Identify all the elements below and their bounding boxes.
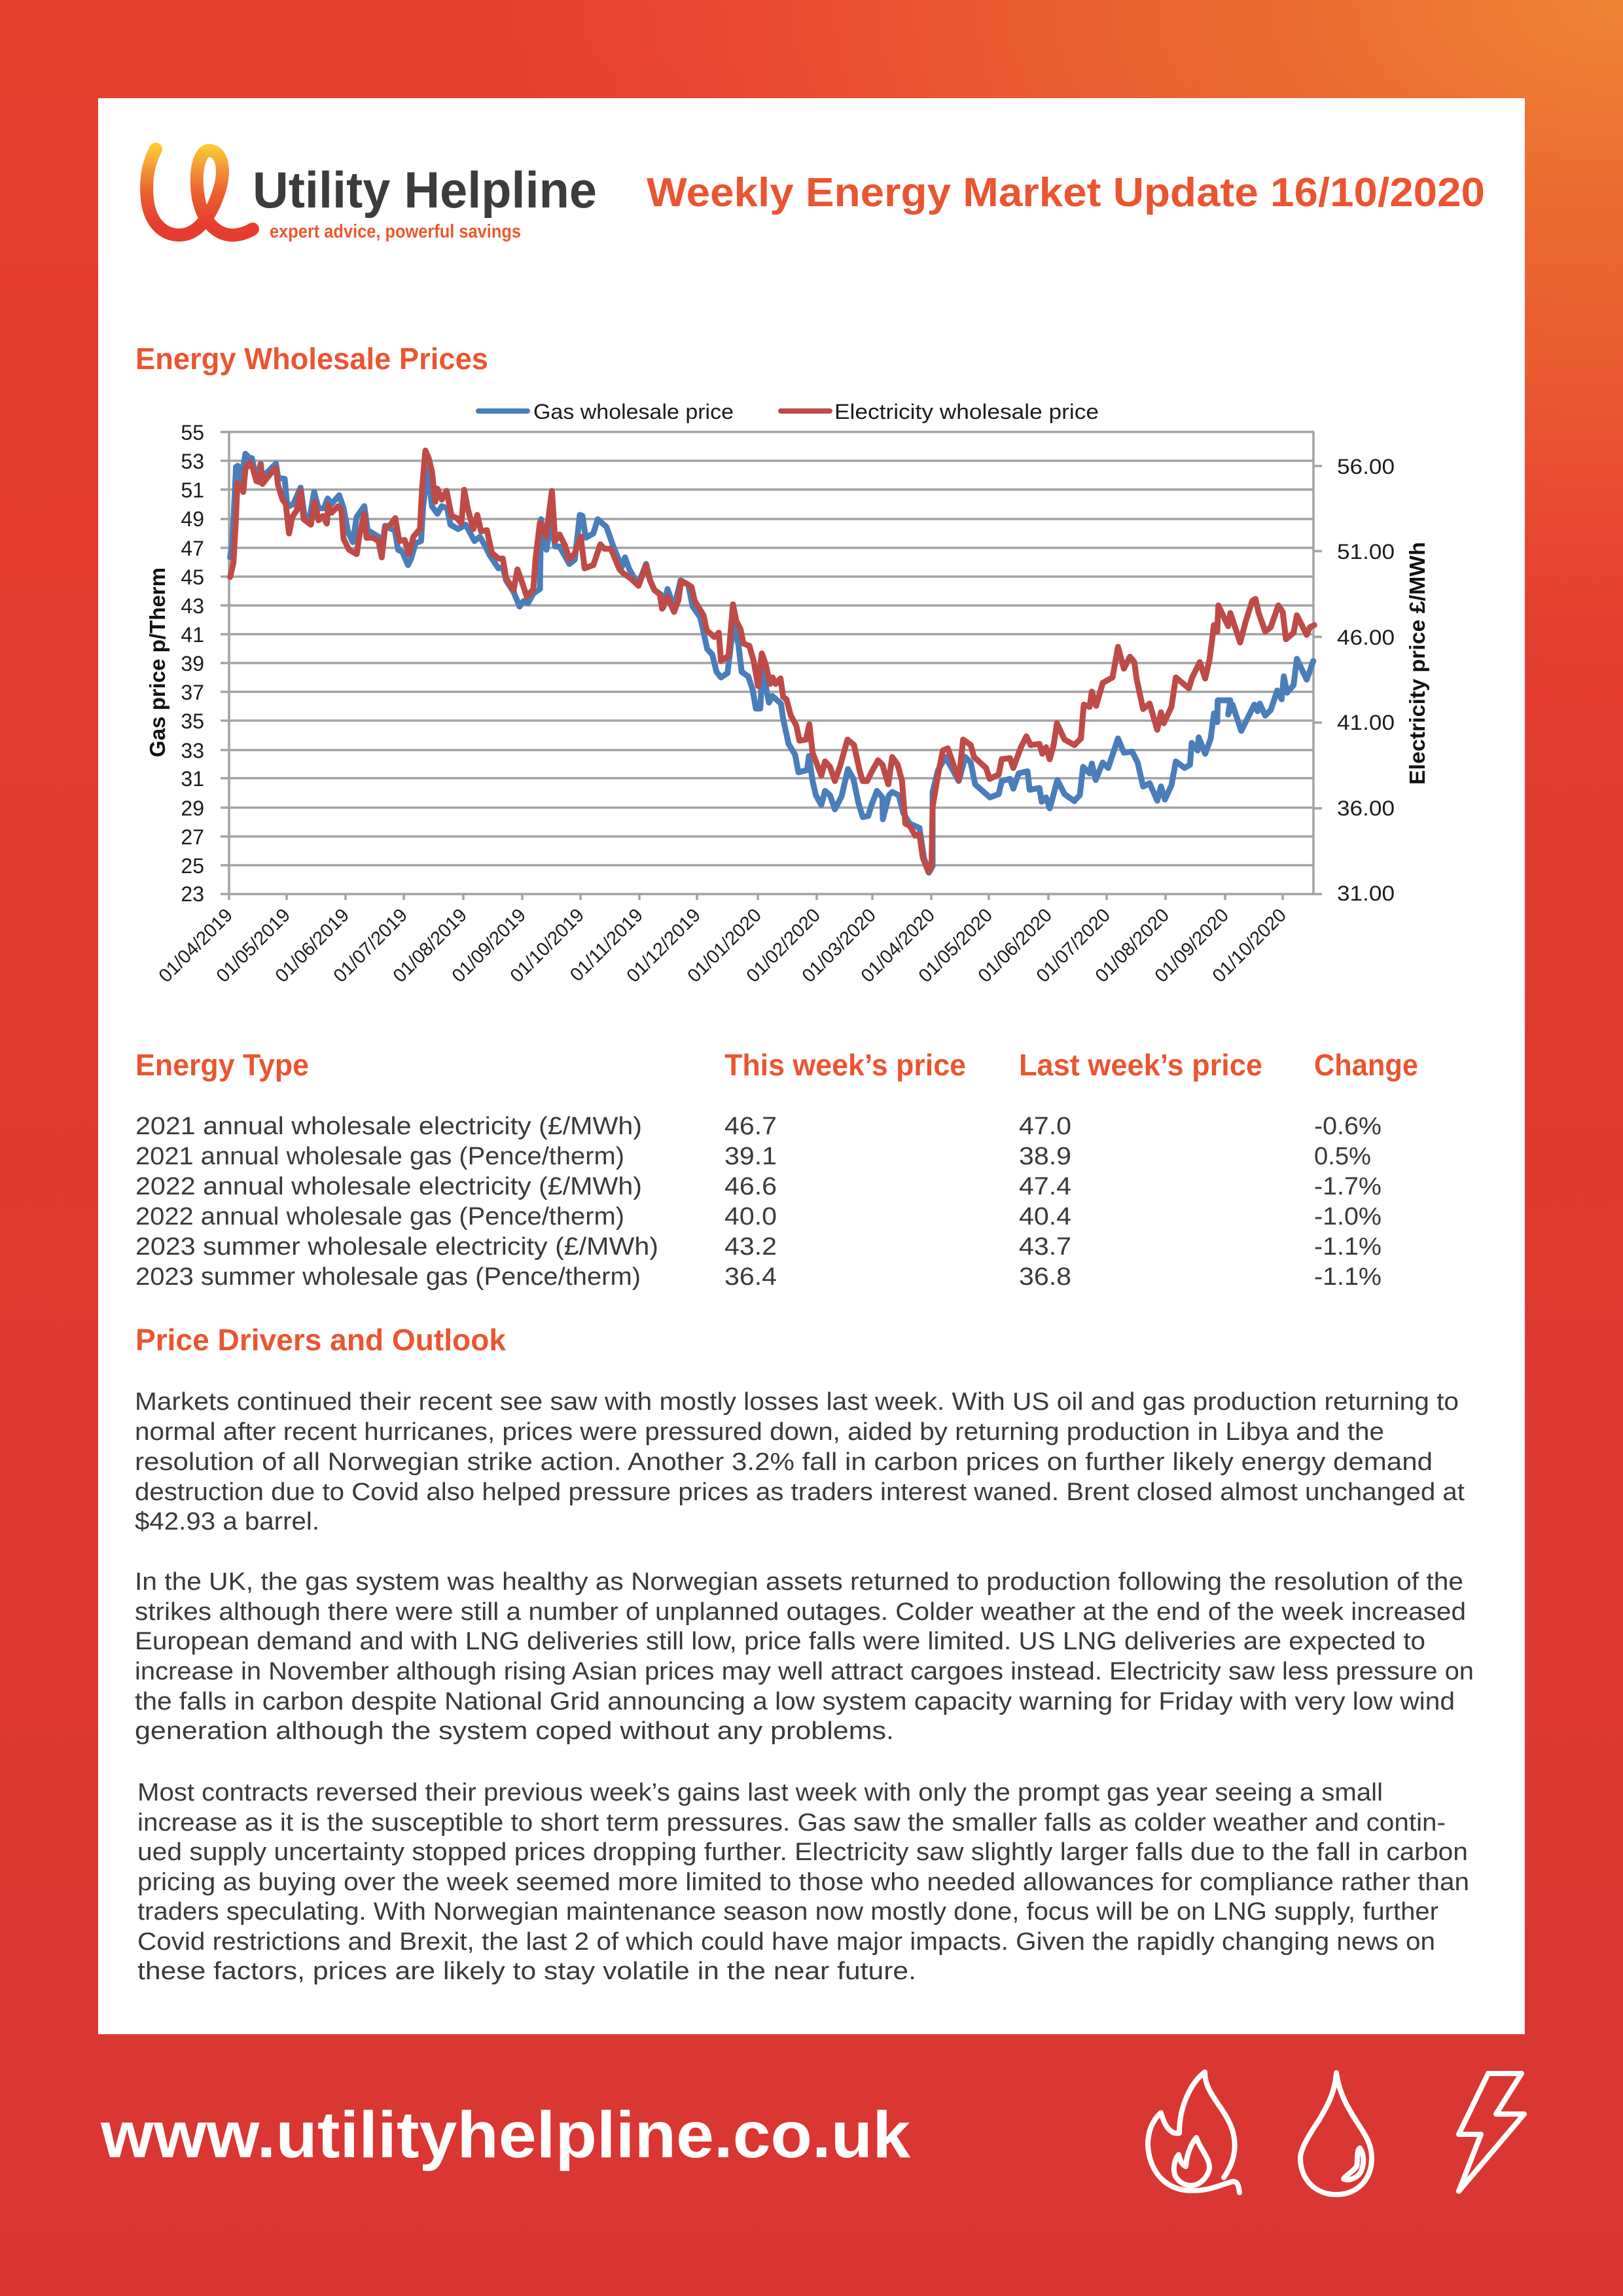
date axis labels: 01/07/2019 bbox=[330, 905, 412, 987]
left axis labels bbox=[181, 421, 204, 906]
row: 2021 annual electricity: 47.0 bbox=[1019, 1113, 1071, 1140]
legend: Gas wholesale price bbox=[533, 400, 734, 423]
heading: Energy Wholesale Prices: Energy Wholesale Prices bbox=[135, 342, 488, 376]
left axis labels: 37 bbox=[181, 681, 204, 704]
paragraph: markets overview: destruction due to Covid also helped pressure prices as traders interest waned. Brent closed almost unchanged at bbox=[135, 1479, 1465, 1506]
row: 2022 annual electricity: 47.4 bbox=[1019, 1173, 1071, 1200]
paragraph: markets overview: normal after recent hurricanes, prices were pressured down, aided by returning production in Libya and the bbox=[135, 1418, 1384, 1446]
left axis labels: 45 bbox=[181, 565, 204, 589]
left axis labels: 47 bbox=[181, 537, 204, 560]
left axis labels: 39 bbox=[181, 652, 204, 675]
row: 2021 annual gas: 39.1 bbox=[724, 1143, 777, 1170]
row: 2021 annual gas: 2021 annual wholesale gas (Pence/therm) bbox=[135, 1143, 624, 1170]
date axis labels: 01/08/2020 bbox=[1092, 905, 1173, 987]
right axis labels bbox=[1337, 455, 1395, 905]
heading: Price Drivers and Outlook: Price Drivers and Outlook bbox=[135, 1323, 506, 1357]
paragraph: markets overview: Markets continued their recent see saw with mostly losses last week. With US oil and gas production returning to bbox=[135, 1388, 1459, 1416]
right axis labels: 46.00 bbox=[1337, 626, 1395, 649]
website address: www.utilityhelpline.co.uk bbox=[100, 2098, 910, 2172]
row: 2022 annual gas bbox=[135, 1203, 1382, 1230]
row: 2022 annual gas: -1.0% bbox=[1314, 1203, 1382, 1230]
date axis labels: 01/05/2019 bbox=[213, 905, 294, 987]
date axis labels: 01/06/2020 bbox=[974, 905, 1056, 987]
icon: gas flame bbox=[1148, 2072, 1240, 2193]
date axis labels: 01/02/2020 bbox=[743, 905, 825, 987]
right axis labels: 56.00 bbox=[1337, 455, 1395, 478]
left axis labels: 43 bbox=[181, 594, 204, 618]
row: 2021 annual electricity: 2021 annual wholesale electricity (£/MWh) bbox=[135, 1113, 642, 1140]
table header: Last week’s price bbox=[1019, 1048, 1262, 1082]
tagline: expert advice, powerful savings bbox=[270, 221, 521, 242]
wordmark: Utility Helpline bbox=[253, 161, 597, 219]
row: 2023 summer gas: -1.1% bbox=[1314, 1263, 1382, 1291]
date axis labels: 01/12/2019 bbox=[623, 905, 705, 987]
left axis labels: 51 bbox=[181, 478, 204, 502]
legend: Electricity wholesale price bbox=[834, 400, 1099, 423]
paragraph: UK market: generation although the system coped without any problems. bbox=[135, 1717, 894, 1745]
paragraph: UK market: increase in November although rising Asian prices may well attract cargoes instead. Electricity saw less pressure on bbox=[135, 1658, 1474, 1685]
price table bbox=[135, 1048, 1418, 1291]
row: 2021 annual gas: 38.9 bbox=[1019, 1143, 1071, 1170]
paragraph: contracts outlook: Most contracts reversed their previous week’s gains last week with only the prompt gas year seeing a small bbox=[137, 1779, 1383, 1806]
right axis labels: 36.00 bbox=[1337, 797, 1395, 820]
row: 2022 annual gas: 40.4 bbox=[1019, 1203, 1071, 1230]
row: 2023 summer gas: 36.8 bbox=[1019, 1263, 1071, 1291]
left axis labels: 35 bbox=[181, 709, 204, 733]
paragraph: UK market: European demand and with LNG deliveries still low, price falls were limited. US LNG deliveries are expected to bbox=[135, 1628, 1425, 1655]
row: 2021 annual electricity: 46.7 bbox=[724, 1113, 777, 1140]
series: electricity wholesale price bbox=[230, 450, 1314, 872]
right axis labels: 41.00 bbox=[1337, 711, 1395, 734]
left axis labels: 53 bbox=[181, 450, 204, 473]
date axis labels: 01/07/2020 bbox=[1033, 905, 1115, 987]
logo: Utility Helpline bbox=[147, 149, 597, 242]
line chart: gas and electricity wholesale prices bbox=[145, 400, 1429, 987]
left axis labels: 29 bbox=[181, 797, 204, 820]
right axis labels: 51.00 bbox=[1337, 540, 1395, 564]
paragraph: markets overview: $42.93 a barrel. bbox=[135, 1508, 319, 1535]
table header: Change bbox=[1314, 1048, 1418, 1082]
paragraph: UK market: the falls in carbon despite National Grid announcing a low system capacity warning for Friday with very low wind bbox=[135, 1688, 1455, 1715]
left axis labels: 31 bbox=[181, 767, 204, 791]
left axis labels: 49 bbox=[181, 507, 204, 531]
row: 2021 annual gas bbox=[135, 1143, 1371, 1170]
paragraph: contracts outlook: these factors, prices are likely to stay volatile in the near future. bbox=[137, 1958, 916, 1985]
row: 2021 annual gas: 0.5% bbox=[1314, 1143, 1371, 1170]
row: 2023 summer gas: 2023 summer wholesale gas (Pence/therm) bbox=[135, 1263, 641, 1291]
legend bbox=[478, 400, 1099, 423]
date axis labels: 01/04/2019 bbox=[155, 905, 237, 987]
left axis labels: 55 bbox=[181, 421, 204, 444]
row: 2023 summer electricity bbox=[135, 1233, 1382, 1261]
date axis labels: 01/09/2020 bbox=[1151, 905, 1233, 987]
left axis labels: 23 bbox=[181, 882, 204, 906]
date axis labels: 01/06/2019 bbox=[272, 905, 353, 987]
icon: looped U ribbon bbox=[147, 149, 253, 235]
row: 2022 annual electricity bbox=[135, 1173, 1382, 1200]
row: 2022 annual electricity: 46.6 bbox=[724, 1173, 777, 1200]
row: 2021 annual electricity bbox=[135, 1113, 1382, 1140]
paragraph: markets overview bbox=[135, 1388, 1465, 1535]
icon: lightning bolt bbox=[1459, 2073, 1524, 2191]
title: Weekly Energy Market Update 16/10/2020 bbox=[647, 170, 1485, 215]
paragraph: contracts outlook: Covid restrictions and Brexit, the last 2 of which could have major impacts. Given the rapidly changing news on bbox=[137, 1928, 1435, 1956]
paragraph: UK market: strikes although there were still a number of unplanned outages. Colder weather at the end of the week increased bbox=[135, 1598, 1466, 1626]
date axis labels: 01/03/2020 bbox=[798, 905, 880, 987]
row: 2023 summer electricity: 2023 summer wholesale electricity (£/MWh) bbox=[135, 1233, 658, 1261]
left axis labels: 41 bbox=[181, 623, 204, 647]
table header bbox=[135, 1048, 1418, 1082]
row: 2022 annual gas: 40.0 bbox=[724, 1203, 777, 1230]
row: 2023 summer gas: 36.4 bbox=[724, 1263, 777, 1291]
series: gas wholesale price bbox=[230, 454, 1313, 872]
date axis labels: 01/05/2020 bbox=[915, 905, 997, 987]
row: 2023 summer electricity: 43.7 bbox=[1019, 1233, 1071, 1261]
row: 2023 summer gas bbox=[135, 1263, 1382, 1291]
row: 2022 annual electricity: 2022 annual wholesale electricity (£/MWh) bbox=[135, 1173, 642, 1200]
row: 2023 summer electricity: 43.2 bbox=[724, 1233, 777, 1261]
row: 2022 annual gas: 2022 annual wholesale gas (Pence/therm) bbox=[135, 1203, 624, 1230]
date axis labels bbox=[155, 905, 1291, 987]
date axis labels: 01/11/2019 bbox=[566, 905, 647, 986]
left axis labels: 27 bbox=[181, 825, 204, 849]
left axis labels: 25 bbox=[181, 854, 204, 878]
date axis labels: 01/04/2020 bbox=[857, 905, 939, 987]
date axis labels: 01/08/2019 bbox=[389, 905, 471, 987]
paragraph: contracts outlook bbox=[137, 1779, 1469, 1985]
date axis labels: 01/01/2020 bbox=[684, 905, 766, 987]
table header: Energy Type bbox=[135, 1048, 309, 1082]
row: 2021 annual electricity: -0.6% bbox=[1314, 1113, 1382, 1140]
date axis labels: 01/09/2019 bbox=[448, 905, 530, 987]
white content panel bbox=[98, 98, 1525, 2034]
paragraph: UK market: In the UK, the gas system was healthy as Norwegian assets returned to production following the resolution of the bbox=[135, 1568, 1463, 1596]
paragraph: contracts outlook: traders speculating. With Norwegian maintenance season now mostly done, focus will be on LNG supply, further bbox=[137, 1898, 1438, 1926]
row: 2022 annual electricity: -1.7% bbox=[1314, 1173, 1382, 1200]
left axis title: Gas price p/Therm bbox=[145, 567, 169, 757]
paragraph: markets overview: resolution of all Norwegian strike action. Another 3.2% fall in carbon prices on further likely energy demand bbox=[135, 1448, 1433, 1476]
paragraph: contracts outlook: ued supply uncertainty stopped prices dropping further. Electricity saw slightly larger falls due to the fall in carbon bbox=[137, 1839, 1468, 1866]
date axis labels: 01/10/2020 bbox=[1209, 905, 1291, 987]
icon: water drop bbox=[1300, 2073, 1372, 2195]
paragraph: UK market bbox=[135, 1568, 1474, 1745]
date axis labels: 01/10/2019 bbox=[507, 905, 588, 987]
paragraph: contracts outlook: pricing as buying over the week seemed more limited to those who needed allowances for compliance rather than bbox=[137, 1869, 1469, 1896]
left axis labels: 33 bbox=[181, 739, 204, 762]
right axis labels: 31.00 bbox=[1337, 882, 1395, 905]
table header: This week’s price bbox=[724, 1048, 966, 1082]
right axis title: Electricity price £/MWh bbox=[1405, 542, 1429, 785]
row: 2023 summer electricity: -1.1% bbox=[1314, 1233, 1382, 1261]
paragraph: contracts outlook: increase as it is the susceptible to short term pressures. Gas saw the smaller falls as colder weather and contin- bbox=[137, 1809, 1446, 1837]
